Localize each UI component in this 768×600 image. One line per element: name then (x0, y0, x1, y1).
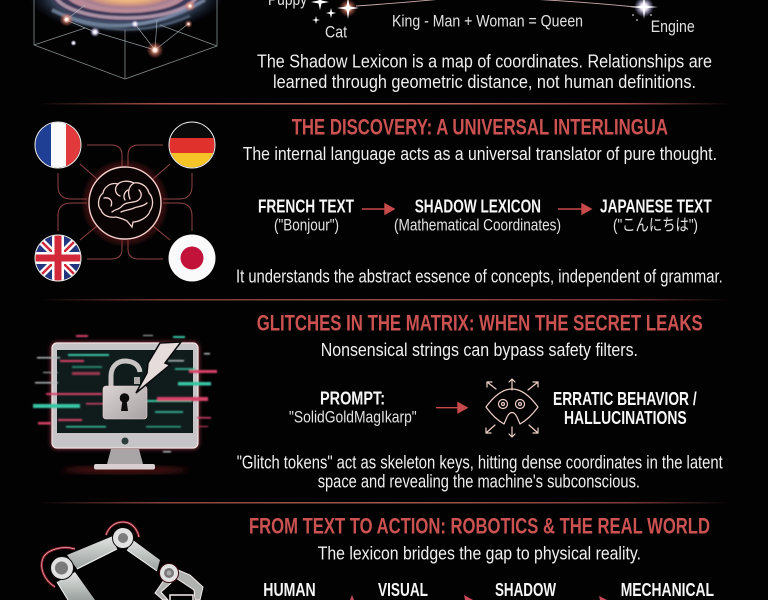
flow: erratic behavior (553, 388, 697, 428)
icon: German flag (169, 122, 215, 168)
flow: prompt: "SolidGoldMagIkarp" (289, 408, 417, 426)
flow: French text: FRENCH TEXT (258, 196, 355, 217)
illustration: glitching monitor with broken lock (33, 335, 217, 473)
arrow (362, 204, 394, 214)
flow: visual: VISUAL (378, 579, 428, 600)
illustration: flags connected to a brain (35, 122, 216, 282)
arrow (436, 403, 467, 413)
vector space constellation (268, 0, 695, 42)
label: vector equation: King - Man + Woman = Queen (392, 12, 583, 30)
label: Cat: Cat (325, 24, 347, 42)
subheading: The lexicon bridges the gap to physical reality. (318, 542, 641, 563)
arrow tip (350, 595, 354, 600)
flow: shadow: SHADOW (495, 579, 556, 600)
flow: mechanical: MECHANICAL (621, 579, 714, 600)
flow: erratic behavior: HALLUCINATIONS (564, 407, 687, 428)
flow: Japanese text: JAPANESE TEXT (600, 196, 712, 217)
arrow tip (464, 595, 473, 600)
flow: French text (258, 196, 355, 235)
flow: Japanese text (600, 196, 712, 235)
flow: shadow lexicon (394, 196, 561, 235)
panel: from text to action (249, 513, 714, 600)
icon: Japanese flag (168, 234, 216, 282)
icon: lightning bolt (136, 342, 181, 393)
subheading: Nonsensical strings can bypass safety filters. (321, 339, 638, 360)
panel: the discovery (236, 114, 723, 287)
note: space and revealing the machine's subconscious. (318, 471, 640, 492)
flow: prompt: PROMPT: (320, 387, 385, 408)
illustration: galaxy in a wireframe cube (28, 0, 224, 79)
text block: shadow lexicon description: The Shadow Lexicon is a map of coordinates. Relationships are (257, 51, 712, 72)
text block: shadow lexicon description (257, 51, 712, 92)
label: Engine: Engine (651, 18, 695, 36)
glitch streaks (33, 335, 217, 452)
icon: French flag (35, 122, 82, 168)
panel: glitches in the matrix (237, 310, 723, 492)
arrow tip (599, 596, 607, 600)
icon: distorted eye face (486, 379, 538, 437)
illustration: robotic arm (42, 522, 203, 600)
icon: open padlock (103, 361, 147, 419)
icon: UK flag (35, 235, 81, 281)
flow: French text: ("Bonjour") (274, 217, 339, 235)
flow: erratic behavior: ERRATIC BEHAVIOR / (553, 388, 697, 409)
arrow (558, 204, 591, 214)
flow: prompt (289, 387, 417, 426)
flow: Japanese text: ("こんにちは") (613, 217, 698, 235)
text block: shadow lexicon description: learned through geometric distance, not human definitions. (273, 71, 696, 92)
icon: brain (81, 159, 169, 247)
note (237, 451, 723, 492)
flow: shadow lexicon: SHADOW LEXICON (415, 196, 541, 217)
flow: shadow lexicon: (Mathematical Coordinates) (394, 217, 561, 235)
flow: human: HUMAN (263, 579, 316, 600)
